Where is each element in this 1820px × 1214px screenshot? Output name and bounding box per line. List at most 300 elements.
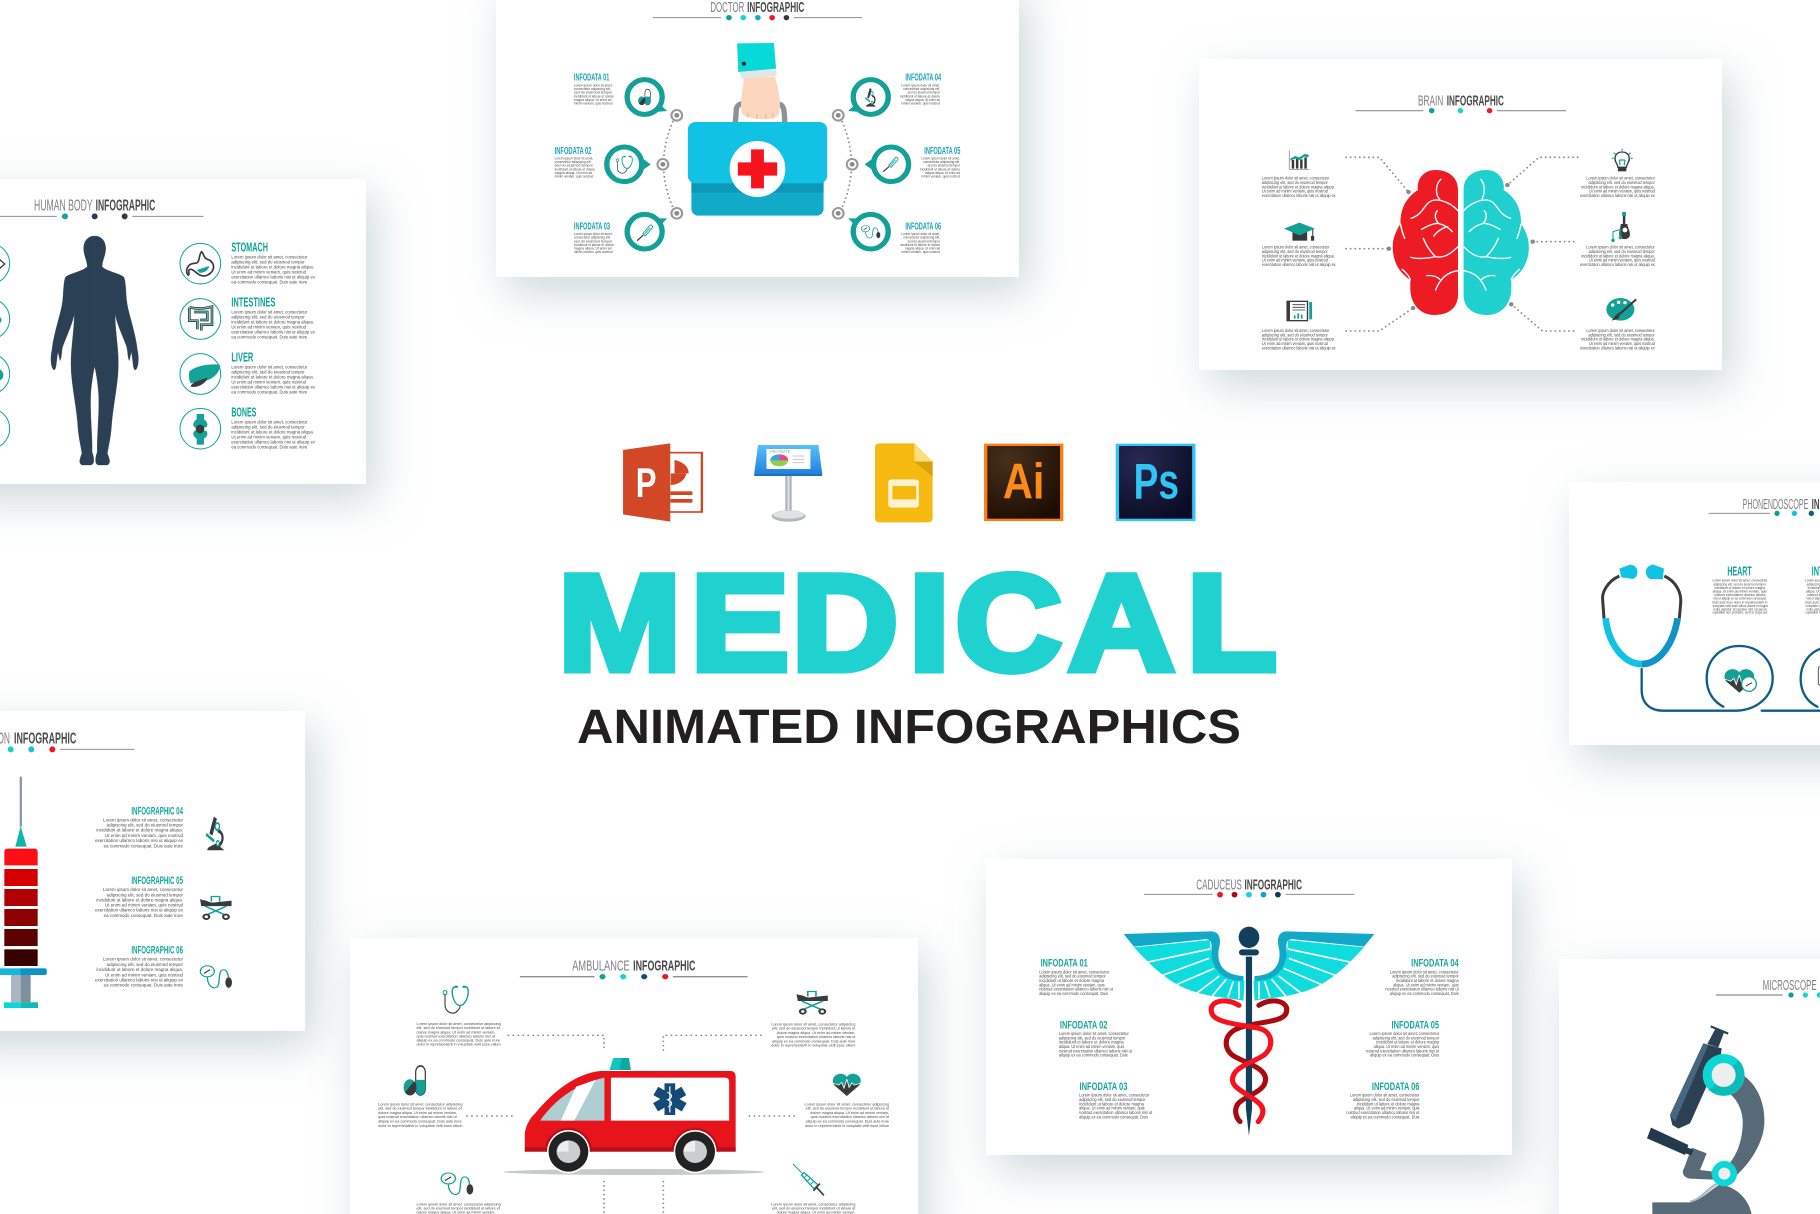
doctor text block 5: INFODATA 05 — [924, 146, 960, 157]
doctor text block 4: Lorem ipsum dolor sit amet, — [901, 83, 940, 87]
bones text block: exercitation ullamco laboris nisi ut aliquip ex — [231, 439, 316, 445]
clipped intestines text block — [1805, 564, 1820, 615]
icon: syringe — [793, 1164, 824, 1195]
icon: intestines — [180, 299, 221, 339]
panel: injection infographic — [0, 711, 305, 1031]
brain text block 1: incididunt ut labore et dolore magna aliqua. — [1262, 184, 1335, 189]
doctor text block 2: magna aliqua. Ut enim ad — [555, 171, 592, 175]
doctor text block 5: magna aliqua. Ut enim ad — [925, 171, 960, 175]
infodata 03 text block: aliquip ex ea commodo consequat. Duis — [1079, 1114, 1149, 1119]
icon: Adobe Illustrator — [986, 445, 1062, 520]
icon: PowerPoint: P — [636, 459, 657, 506]
infodata 04 text block — [1385, 958, 1459, 996]
ambulance illustration — [504, 1058, 764, 1175]
dark snake — [1226, 1001, 1287, 1122]
infographic 04 text block: exercitation ullamco laboris nisi ut aliquip ex — [95, 838, 183, 844]
stomach text block: adipiscing elit, sed do eiusmod tempor — [231, 260, 305, 266]
ambulance text block 5: dolore magna aliqua. Ut enim ad minim veniam, — [810, 1110, 889, 1115]
doctor text block 2: incididunt ut labore et dolore — [555, 167, 595, 171]
bones text block: BONES — [231, 406, 256, 420]
heart text block: Lorem ipsum dolor sit amet, consectetur — [1712, 579, 1768, 583]
intestines text block: Lorem ipsum dolor sit amet, consectetur — [231, 310, 308, 316]
doctor heading — [653, 0, 862, 20]
infodata 06 text block: incididunt ut labore et dolore magna — [1357, 1101, 1420, 1106]
doctor text block 5: minim veniam, quis nostrud — [921, 174, 960, 178]
bones text block: adipiscing elit, sed do eiusmod tempor — [231, 425, 305, 431]
ambulance text block 2: dolor in reprehenderit in voluptate velit esse cillum — [378, 1123, 463, 1128]
panel: ambulance infographic — [350, 938, 918, 1214]
bones text block: ea commodo consequat. Duis aute irure — [231, 444, 308, 450]
infographic 06 text block: incididunt ut labore et dolore magna aliqua. — [96, 967, 183, 973]
doctor text block 6: minim veniam, quis nostrud — [901, 250, 940, 254]
icon: blood pressure gauge — [200, 966, 232, 988]
icon: stethoscope — [616, 156, 632, 173]
infodata 02 text block: aliqua. Ut enim ad minim veniam, quis — [1059, 1044, 1125, 1049]
ambulance text block 6: elit, sed do eiusmod tempor incididunt ut labore et — [772, 1206, 856, 1210]
doctor text block 2: INFODATA 02 — [555, 146, 592, 157]
icon: pill — [404, 1066, 425, 1095]
heart text block: nulla pariatur. Excepteur sint occaecat — [1713, 607, 1767, 611]
brain text block 4: Ut enim ad minim veniam, quis nostrud — [1589, 189, 1655, 194]
infodata 01 text block: aliqua. Ut enim ad minim veniam, quis — [1039, 982, 1105, 987]
body silhouette — [51, 236, 138, 465]
dotted connectors — [1346, 157, 1578, 331]
doctor text block 3: INFODATA 03 — [574, 222, 610, 233]
icon: Adobe Photoshop — [1117, 445, 1194, 520]
doctor text block 1: INFODATA 01 — [574, 73, 609, 84]
brain text block 2: exercitation ullamco laboris nisi ut aliquip ex — [1262, 262, 1336, 267]
stomach text block: Ut enim ad minim veniam, quis nostrud — [231, 269, 306, 275]
icon: Adobe Photoshop: Ps — [1134, 453, 1179, 509]
brain text block 6 — [1580, 328, 1655, 350]
heart text block — [1712, 564, 1768, 615]
panel: caduceus infographic — [986, 859, 1512, 1155]
intestines text block: ea commodo consequat. Duis aute irure — [231, 334, 308, 340]
brain text block 1: adipiscing elit, sed do eiusmod tempor — [1262, 180, 1328, 185]
infographic 04 text block: adipiscing elit, sed do eiusmod tempor — [107, 823, 183, 829]
ambulance text block 1: Lorem ipsum dolor sit amet, consectetur adipiscing — [417, 1021, 501, 1026]
brain text block 6: exercitation ullamco laboris nisi ut aliquip ex — [1580, 345, 1655, 350]
icon: graduation cap — [1284, 223, 1315, 241]
intestines text block: INTESTINES — [231, 296, 275, 310]
stethoscope illustration — [1603, 565, 1820, 711]
injection heading: INFOGRAPHIC — [14, 730, 76, 747]
panel: human body infographic — [0, 179, 366, 484]
caduceus contents — [1039, 877, 1459, 1136]
icon: thermometer — [883, 157, 898, 172]
heart text block: Duis aute irure dolor in reprehenderit in — [1712, 600, 1767, 604]
doctor text block 2: consectetur adipiscing elit, — [555, 160, 591, 164]
panel: microscope infographic — [1559, 959, 1820, 1214]
infodata 03 text block: adipiscing elit, sed do eiusmod tempor — [1079, 1097, 1146, 1102]
microscope contents — [1647, 977, 1820, 1214]
doctor text block 6: sed do eiusmod tempor — [907, 239, 941, 243]
doctor text block 1: sed do eiusmod tempor — [574, 91, 613, 95]
heart text block: voluptate velit esse cillum dolore eu fugiat — [1713, 604, 1768, 608]
ambulance text block 4: dolore magna aliqua. Ut enim ad minim veniam, — [777, 1030, 855, 1035]
liver text block: ea commodo consequat. Duis aute irure — [231, 389, 308, 395]
icon: partial device — [1818, 667, 1820, 685]
ambulance text block 2: aliquip ex ea commodo consequat. Duis aute irure — [378, 1119, 462, 1123]
infodata 06 text block — [1346, 1081, 1420, 1119]
human body contents — [0, 198, 316, 465]
icon: microscope — [206, 817, 224, 850]
infodata 06 text block: aliquip ex ea commodo consequat. Duis — [1351, 1114, 1420, 1119]
intestines text block: exercitation ullamco laboris nisi ut aliquip ex — [231, 329, 316, 335]
injection card — [0, 711, 305, 1031]
brain text block 4: Lorem ipsum dolor sit amet, consectetur — [1586, 176, 1655, 181]
brain text block 3: Ut enim ad minim veniam, quis nostrud — [1262, 341, 1328, 346]
brain text block 5: Lorem ipsum dolor sit amet, consectetur — [1586, 245, 1655, 250]
infodata 06 text block: nostrud exercitation ullamco laboris nisi ut — [1346, 1110, 1420, 1115]
doctor text block 2: minim veniam, quis nostrud — [555, 174, 593, 178]
doctor text block 4: INFODATA 04 — [905, 73, 941, 84]
intestines text block — [231, 296, 316, 340]
heart text block: cupidatat non proident, sunt in culpa qui — [1712, 611, 1767, 615]
infodata 04 text block: Lorem ipsum dolor sit amet, consectetur — [1390, 969, 1459, 974]
brain heading: INFOGRAPHIC — [1447, 93, 1504, 109]
brain text block 2: adipiscing elit, sed do eiusmod tempor — [1262, 249, 1328, 254]
human body card — [0, 179, 366, 484]
icon: stretcher — [797, 991, 828, 1014]
phonendoscope heading — [1709, 497, 1820, 516]
human body heading: HUMAN BODY — [34, 198, 93, 215]
infodata 04 text block: INFODATA 04 — [1411, 958, 1459, 970]
icon: PowerPoint — [623, 443, 702, 522]
hand holding medical case — [737, 43, 780, 119]
brain text block 2: Ut enim ad minim veniam, quis nostrud — [1262, 258, 1328, 263]
doctor text block 5: consectetur adipiscing elit, — [923, 160, 960, 164]
icon: bar chart — [1289, 151, 1309, 169]
bubble rings — [607, 80, 909, 249]
icon: heart with gauge — [1724, 669, 1756, 693]
human body heading: INFOGRAPHIC — [96, 198, 155, 215]
ambulance heading: AMBULANCE — [572, 958, 630, 974]
software icons row — [623, 443, 1194, 522]
liver text block: incididunt ut labore et dolore magna aliqua. — [231, 374, 314, 380]
infographic 04 text block: INFOGRAPHIC 04 — [131, 805, 183, 817]
infographic 06 text block: Ut enim ad minim veniam, quis nostrud — [105, 972, 183, 978]
brain left lobe — [1393, 170, 1458, 315]
doctor text block 2: Lorem ipsum dolor sit amet, — [555, 156, 593, 160]
brain text block 6: Ut enim ad minim veniam, quis nostrud — [1589, 341, 1655, 346]
ambulance text block 3: elit, sed do eiusmod tempor incididunt ut labore et — [417, 1206, 501, 1210]
medical case — [688, 103, 827, 216]
infodata 03 text block: nostrud exercitation ullamco laboris nisi ut — [1079, 1110, 1153, 1115]
icon: palette and brush — [1606, 298, 1636, 321]
brain text block 5: adipiscing elit, sed do eiusmod tempor — [1588, 249, 1655, 254]
doctor text block 1: incididunt ut labore et dolore — [574, 94, 614, 98]
doctor text block 4: magna aliqua. Ut enim ad — [905, 98, 940, 102]
infodata 02 text block: Lorem ipsum dolor sit amet, consectetur — [1059, 1031, 1129, 1036]
icon: guitar and music note — [1611, 212, 1630, 242]
infodata 01 text block — [1039, 958, 1114, 996]
infographic 05 text block: adipiscing elit, sed do eiusmod tempor — [107, 892, 183, 898]
ambulance text block 2: dolore magna aliqua. Ut enim ad minim veniam, — [378, 1110, 457, 1115]
doctor text block 5: Lorem ipsum dolor sit amet, — [921, 156, 960, 160]
infographic 04 text block: Ut enim ad minim veniam, quis nostrud — [105, 833, 183, 839]
brain text block 2: Lorem ipsum dolor sit amet, consectetur — [1262, 245, 1330, 250]
ambulance text block 2 — [378, 1102, 463, 1128]
brain text block 1: Ut enim ad minim veniam, quis nostrud — [1262, 189, 1328, 194]
brain text block 5 — [1580, 245, 1655, 267]
icon: Adobe Illustrator: Ai — [1003, 453, 1044, 509]
brain text block 3: adipiscing elit, sed do eiusmod tempor — [1262, 332, 1328, 337]
ambulance card — [350, 938, 918, 1214]
infodata 06 text block: Lorem ipsum dolor sit amet, consectetur — [1350, 1093, 1420, 1098]
brain text block 6: incididunt ut labore et dolore magna aliqua. — [1581, 337, 1655, 342]
icon: heart pulse — [833, 1074, 861, 1096]
liver text block: exercitation ullamco laboris nisi ut aliquip ex — [231, 384, 316, 390]
heart text block: HEART — [1727, 564, 1752, 578]
doctor text block 1: Lorem ipsum dolor sit amet, — [574, 83, 612, 87]
infographic 05 text block: ea commodo consequat. Duis aute irure — [104, 913, 183, 919]
infographic 04 text block: ea commodo consequat. Duis aute irure — [104, 843, 183, 849]
icon: pill — [638, 89, 650, 105]
infodata 02 text block: INFODATA 02 — [1060, 1019, 1107, 1031]
heart text block: adipiscing elit, sed do eiusmod tempor — [1713, 582, 1767, 586]
infographic 04 text block — [95, 805, 183, 849]
infodata 01 text block: adipiscing elit, sed do eiusmod tempor — [1039, 974, 1106, 979]
icon: clipboard — [1286, 301, 1312, 321]
caduceus heading: CADUCEUS — [1196, 877, 1242, 893]
ambulance contents — [378, 958, 890, 1214]
brain text block 5: exercitation ullamco laboris nisi ut aliquip ex — [1580, 262, 1655, 267]
doctor text block 5: sed do eiusmod tempor — [927, 164, 961, 168]
brain text block 3: Lorem ipsum dolor sit amet, consectetur — [1262, 328, 1330, 333]
subtitle: animated infographics: ANIMATED INFOGRAPHICS — [577, 701, 1241, 754]
panel: phonendoscope infographic — [1569, 482, 1820, 745]
infographic 05 text block — [95, 875, 183, 919]
infodata 05 text block: nostrud exercitation ullamco laboris nisi ut — [1366, 1048, 1440, 1053]
infodata 04 text block: adipiscing elit, sed do eiusmod tempor — [1392, 974, 1459, 979]
ambulance text block 4: dolor in reprehenderit in voluptate velit esse cillum — [771, 1043, 856, 1047]
panel: doctor infographic — [496, 0, 1019, 277]
infographic 06 text block: exercitation ullamco laboris nisi ut aliquip ex — [95, 977, 183, 983]
bones text block: Ut enim ad minim veniam, quis nostrud — [231, 434, 306, 440]
infodata 05 text block: aliquip ex ea commodo consequat. Duis — [1370, 1053, 1440, 1058]
infographic 05 text block: Lorem ipsum dolor sit amet, consectetur — [103, 887, 183, 893]
brain right lobe — [1464, 170, 1529, 315]
icon: Google Slides — [875, 443, 933, 522]
ambulance text block 2: quis nostrud exercitation ullamco laboris nisi ut — [378, 1114, 457, 1119]
infographic 06 text block: ea commodo consequat. Duis aute irure — [104, 983, 183, 989]
ambulance text block 2: elit, sed do eiusmod tempor incididunt ut labore et — [378, 1106, 462, 1111]
infodata 03 text block: incididunt ut labore et dolore magna — [1079, 1101, 1144, 1106]
brain text block 4: exercitation ullamco laboris nisi ut aliquip ex — [1580, 193, 1655, 198]
ambulance text block 5: Lorem ipsum dolor sit amet, consectetur adipiscing — [805, 1102, 890, 1107]
microscope card — [1559, 959, 1820, 1214]
phonendoscope contents — [1603, 497, 1820, 711]
icon: syringe — [637, 225, 653, 241]
doctor text block 1: minim veniam, quis nostrud — [574, 101, 612, 105]
ambulance text block 1 — [417, 1021, 501, 1047]
brain text block 5: incididunt ut labore et dolore magna aliqua. — [1581, 253, 1655, 258]
infographic 06 text block: Lorem ipsum dolor sit amet, consectetur — [103, 957, 183, 963]
infodata 05 text block: INFODATA 05 — [1392, 1019, 1439, 1031]
left wing — [1124, 931, 1244, 1001]
infodata 04 text block: aliquip ex ea commodo consequat. Duis — [1390, 991, 1459, 996]
infodata 01 text block: INFODATA 01 — [1041, 958, 1088, 970]
ambulance heading — [520, 958, 748, 979]
infodata 05 text block: aliqua. Ut enim ad minim veniam, quis — [1374, 1044, 1440, 1049]
infodata 01 text block: aliquip ex ea commodo consequat. Duis — [1039, 991, 1109, 996]
infodata 06 text block: adipiscing elit, sed do eiusmod tempor — [1353, 1097, 1420, 1102]
infodata 05 text block: adipiscing elit, sed do eiusmod tempor — [1373, 1035, 1440, 1040]
injection heading — [0, 730, 134, 752]
infodata 06 text block: INFODATA 06 — [1372, 1081, 1419, 1093]
icon: light bulb — [1612, 149, 1633, 171]
ambulance text block 4: elit, sed do eiusmod tempor incididunt ut labore et — [772, 1026, 856, 1031]
doctor text block 3: sed do eiusmod tempor — [574, 239, 613, 243]
ambulance text block 4: aliquip ex ea commodo consequat. Duis aute irure — [772, 1039, 856, 1043]
ambulance text block 1: dolor in reprehenderit in voluptate velit esse cillum — [417, 1042, 501, 1047]
brain text block 3 — [1262, 328, 1336, 350]
brain text block 3: exercitation ullamco laboris nisi ut aliquip ex — [1262, 345, 1336, 350]
heart text block: aliqua. Ut enim ad minim veniam, quis — [1713, 590, 1767, 594]
bones text block: Lorem ipsum dolor sit amet, consectetur — [231, 420, 308, 426]
ambulance text block 6: Lorem ipsum dolor sit amet, consectetur adipiscing — [771, 1202, 856, 1206]
ambulance text block 5: aliquip ex ea commodo consequat. Duis aute irure — [806, 1119, 890, 1123]
infographic 06 text block — [95, 944, 183, 989]
brain text block 2: incididunt ut labore et dolore magna aliqua. — [1262, 253, 1335, 258]
doctor text block 6: INFODATA 06 — [905, 222, 941, 233]
ambulance text block 1: elit, sed do eiusmod tempor incididunt ut labore et — [417, 1025, 501, 1030]
icon: bone joint — [180, 408, 221, 449]
infodata 02 text block — [1059, 1019, 1133, 1058]
human body heading — [0, 198, 203, 219]
caduceus heading: INFOGRAPHIC — [1244, 877, 1302, 893]
infographic 06 text block: INFOGRAPHIC 06 — [131, 944, 183, 956]
brain text block 1 — [1262, 176, 1336, 198]
infodata 01 text block: incididunt ut labore et dolore magna — [1039, 978, 1104, 983]
infodata 04 text block: incididunt ut labore et dolore magna — [1396, 978, 1459, 983]
icon: Keynote — [754, 445, 822, 522]
clipped left circles — [0, 243, 10, 449]
brain text block 1: Lorem ipsum dolor sit amet, consectetur — [1262, 176, 1330, 181]
brain heading — [1356, 93, 1566, 113]
doctor text block 6: incididunt ut labore et dolore — [900, 243, 940, 247]
brain text block 4: incididunt ut labore et dolore magna aliqua. — [1581, 184, 1655, 189]
doctor text block 3: minim veniam, quis nostrud — [574, 250, 612, 254]
doctor text block 3: Lorem ipsum dolor sit amet, — [574, 232, 612, 236]
doctor contents — [555, 0, 961, 254]
doctor text block 1 — [574, 73, 614, 105]
brain text block 6: adipiscing elit, sed do eiusmod tempor — [1588, 332, 1655, 337]
infodata 06 text block: aliqua. Ut enim ad minim veniam, quis — [1354, 1106, 1420, 1111]
brain text block 2 — [1262, 245, 1336, 267]
doctor text block 1: consectetur adipiscing elit, — [574, 87, 611, 91]
red snake — [1211, 1001, 1271, 1122]
doctor text block 6: magna aliqua. Ut enim ad — [905, 247, 940, 251]
brain text block 5: Ut enim ad minim veniam, quis nostrud — [1589, 258, 1655, 263]
brain text block 3: incididunt ut labore et dolore magna aliqua. — [1262, 337, 1335, 342]
brain text block 4 — [1580, 176, 1655, 198]
stomach text block: ea commodo consequat. Duis aute irure — [231, 279, 308, 285]
doctor text block 6: consectetur adipiscing elit, — [903, 236, 940, 240]
ambulance text block 3: Lorem ipsum dolor sit amet, consectetur adipiscing — [417, 1202, 501, 1206]
injection contents — [0, 730, 232, 1008]
infodata 05 text block: incididunt ut labore et dolore magna — [1376, 1040, 1440, 1045]
doctor text block 2: sed do eiusmod tempor — [555, 164, 594, 168]
ambulance text block 2: Lorem ipsum dolor sit amet, consectetur adipiscing — [378, 1102, 463, 1107]
infographic 06 text block: adipiscing elit, sed do eiusmod tempor — [107, 962, 183, 968]
infographic 05 text block: exercitation ullamco laboris nisi ut aliquip ex — [95, 908, 183, 914]
brain text block 1: exercitation ullamco laboris nisi ut aliquip ex — [1262, 193, 1336, 198]
doctor text block 4: incididunt ut labore et dolore — [900, 94, 940, 98]
doctor text block 4: minim veniam, quis nostrud — [901, 101, 940, 105]
ambulance text block 4 — [771, 1022, 856, 1047]
doctor text block 3 — [574, 222, 614, 254]
phonendoscope card — [1569, 482, 1820, 745]
infographic 04 text block: incididunt ut labore et dolore magna aliqua. — [96, 828, 183, 834]
infographic 05 text block: INFOGRAPHIC 05 — [131, 875, 183, 887]
infographic 04 text block: Lorem ipsum dolor sit amet, consectetur — [103, 817, 183, 823]
caduceus heading — [1144, 877, 1354, 897]
infodata 04 text block: aliqua. Ut enim ad minim veniam, quis — [1393, 982, 1459, 987]
ambulance text block 5: quis nostrud exercitation ullamco laboris nisi ut — [811, 1114, 890, 1119]
icon: Keynote: KEYNOTE — [770, 450, 791, 453]
ambulance text block 4: quis nostrud exercitation ullamco laboris nisi ut — [777, 1034, 856, 1039]
grey connector nodes — [657, 110, 857, 219]
liver text block: LIVER — [231, 351, 253, 365]
doctor text block 6 — [900, 222, 941, 254]
intestines text block: incididunt ut labore et dolore magna aliqua. — [231, 319, 314, 325]
syringe illustration — [0, 776, 47, 1008]
brain heading: BRAIN — [1418, 93, 1443, 109]
doctor text block 3: incididunt ut labore et dolore — [574, 243, 614, 247]
brain text block 6: Lorem ipsum dolor sit amet, consectetur — [1586, 328, 1655, 333]
doctor card — [496, 0, 1019, 277]
intestines text block: adipiscing elit, sed do eiusmod tempor — [231, 315, 305, 321]
icon: stomach — [180, 243, 221, 284]
doctor text block 6: Lorem ipsum dolor sit amet, — [901, 232, 940, 236]
liver text block: Ut enim ad minim veniam, quis nostrud — [231, 379, 306, 385]
stomach text block — [231, 241, 316, 285]
infodata 05 text block: Lorem ipsum dolor sit amet, consectetur — [1370, 1031, 1440, 1036]
icon: stretcher — [200, 897, 232, 919]
doctor text block 5: incididunt ut labore et dolore — [920, 167, 960, 171]
ambulance text block 1: quis nostrud exercitation ullamco laboris nisi ut — [417, 1034, 496, 1038]
ambulance heading: INFOGRAPHIC — [633, 958, 696, 974]
liver text block — [231, 351, 316, 395]
liver text block: adipiscing elit, sed do eiusmod tempor — [231, 370, 305, 376]
infographic 05 text block: incididunt ut labore et dolore magna aliqua. — [96, 897, 183, 903]
doctor text block 4 — [900, 73, 941, 105]
bones text block — [231, 406, 316, 450]
infodata 01 text block: Lorem ipsum dolor sit amet, consectetur — [1039, 969, 1110, 974]
infodata 03 text block: INFODATA 03 — [1080, 1081, 1127, 1093]
ambulance text block 5: elit, sed do eiusmod tempor incididunt ut labore et — [806, 1106, 890, 1111]
doctor text block 4: sed do eiusmod tempor — [907, 91, 941, 95]
title: MEDICAL: MEDICAL — [558, 547, 1277, 700]
stomach text block: Lorem ipsum dolor sit amet, consectetur — [231, 255, 308, 261]
doctor text block 3: magna aliqua. Ut enim ad — [574, 247, 611, 251]
icon: liver — [180, 354, 221, 394]
bones text block: incididunt ut labore et dolore magna aliqua. — [231, 429, 314, 435]
caduceus card — [986, 859, 1512, 1155]
brain text block 4: adipiscing elit, sed do eiusmod tempor — [1588, 180, 1655, 185]
doctor text block 3: consectetur adipiscing elit, — [574, 236, 611, 240]
icon: stethoscope — [443, 986, 468, 1013]
stomach text block: exercitation ullamco laboris nisi ut aliquip ex — [231, 274, 316, 280]
icon: blood pressure gauge — [441, 1173, 473, 1195]
infodata 03 text block — [1079, 1081, 1153, 1119]
stomach text block: STOMACH — [231, 241, 268, 255]
infodata 04 text block: nostrud exercitation ullamco laboris nisi ut — [1385, 987, 1459, 992]
doctor text block 1: magna aliqua. Ut enim ad — [574, 98, 611, 102]
heart text block: nostrud exercitation ullamco laboris — [1714, 593, 1766, 597]
